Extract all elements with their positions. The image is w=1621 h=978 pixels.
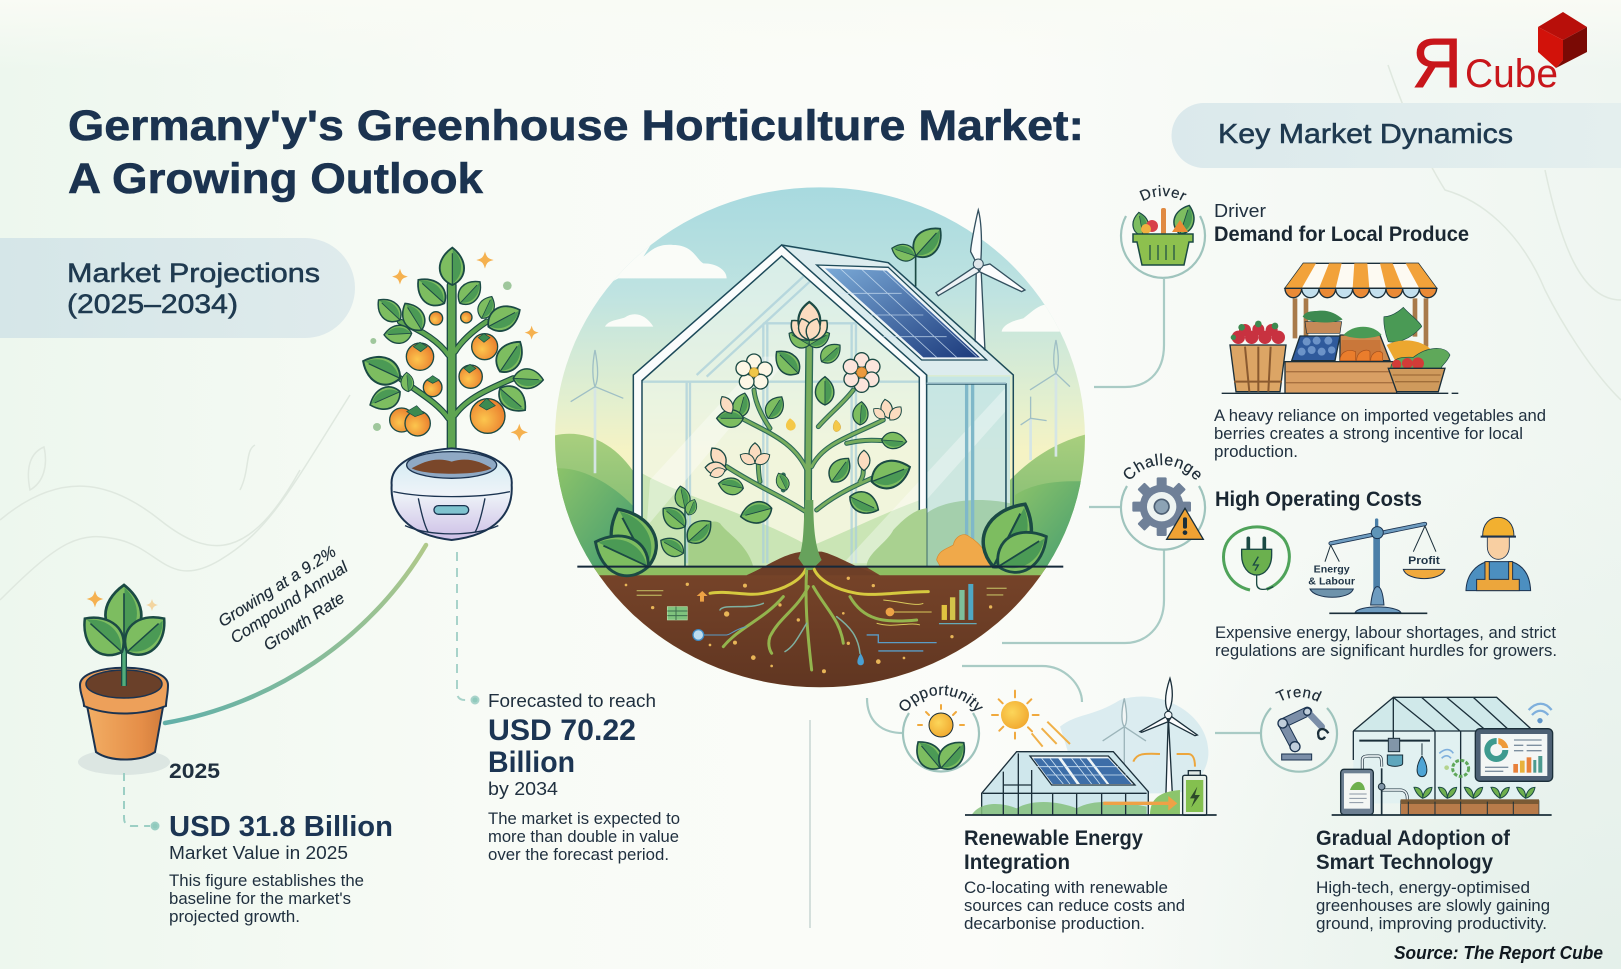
text block: challenge <box>1215 487 1557 660</box>
text block: driver: berries creates a strong incentive for local <box>1214 424 1523 443</box>
text block: 2034 forecast: over the forecast period. <box>488 845 669 864</box>
connector: challenge to centre <box>1002 507 1164 643</box>
text block: driver: production. <box>1214 442 1298 461</box>
title <box>68 102 1084 203</box>
text block: trend: greenhouses are slowly gaining <box>1316 896 1550 915</box>
connector: 2025 dashed <box>124 773 158 830</box>
bushes and ground <box>688 508 990 567</box>
panel: key market dynamics heading: Key Market Dynamics <box>1218 118 1513 149</box>
icon: energy plug, balance scale and worker: & Labour <box>1308 576 1355 587</box>
text block: opportunity: Co-locating with renewable <box>964 878 1168 897</box>
text block: 2025 value: This figure establishes the <box>169 871 364 890</box>
foreground plants <box>587 485 1056 584</box>
panel: market projections heading <box>0 238 355 338</box>
connector: driver to centre <box>1094 278 1164 387</box>
text block: challenge: High Operating Costs <box>1215 487 1422 511</box>
panel: market projections heading: Market Projections <box>67 258 320 288</box>
text block: 2025 value <box>169 760 393 926</box>
text block: 2034 forecast: more than double in value <box>488 827 679 846</box>
text block: driver: Demand for Local Produce <box>1214 223 1469 246</box>
tree flowers <box>705 302 905 480</box>
text block: challenge: regulations are significant hurdles for growers. <box>1215 641 1557 660</box>
text block: driver: Driver <box>1214 201 1266 221</box>
icon: smart greenhouse <box>1332 697 1553 815</box>
icon: challenge gear badge: Challenge <box>1124 453 1201 480</box>
icon: opportunity sun badge: Opportunity <box>900 685 983 712</box>
tree trunk and branches <box>727 348 883 563</box>
connector: opportunity to trend <box>1215 732 1262 734</box>
text block: opportunity: Integration <box>964 851 1070 874</box>
text block: opportunity: decarbonise production. <box>964 914 1145 933</box>
text block: 2025 value: Market Value in 2025 <box>169 842 348 863</box>
text block: 2034 forecast: Billion <box>488 746 575 779</box>
text block: 2025 value: USD 31.8 Billion <box>169 811 393 843</box>
icon: trend robot arm badge <box>1260 688 1338 773</box>
text block: 2025 value: baseline for the market's <box>169 889 351 908</box>
text block: opportunity <box>964 827 1185 933</box>
text block: trend: ground, improving productivity. <box>1316 914 1547 933</box>
text block: 2034 forecast <box>488 690 680 864</box>
title: A Growing Outlook <box>68 155 483 203</box>
text block: trend: Gradual Adoption of <box>1316 827 1511 850</box>
text block: opportunity: Renewable Energy <box>964 827 1143 850</box>
text block: 2034 forecast: The market is expected to <box>488 809 680 828</box>
icon: challenge gear badge <box>1120 453 1206 551</box>
text block: trend <box>1316 827 1550 933</box>
sprout behind greenhouse <box>889 220 949 287</box>
text block: trend: High-tech, energy-optimised <box>1316 878 1530 897</box>
icon: driver basket badge <box>1120 185 1206 279</box>
icon: energy plug, balance scale and worker: Profit <box>1408 555 1440 567</box>
icon: opportunity sun badge <box>900 685 983 773</box>
icon: fruit tree in smart pot <box>357 248 544 540</box>
icon: energy plug, balance scale and worker: Energy <box>1314 564 1350 575</box>
text block: challenge: Expensive energy, labour shortages, and strict <box>1215 623 1556 642</box>
text block: driver: A heavy reliance on imported vegetables and <box>1214 406 1546 425</box>
wind turbine <box>936 210 1025 350</box>
connector: opportunity to centre <box>867 666 1082 733</box>
CAGR label: Growing at a 9.2% <box>215 543 339 631</box>
text block: 2034 forecast: by 2034 <box>488 778 558 799</box>
CAGR label: Compound Annual <box>227 557 352 647</box>
arrow: growth curve <box>165 545 426 723</box>
logo: RCube: Cube <box>1465 52 1558 96</box>
solar panel <box>817 265 987 360</box>
tree leaves <box>717 339 915 527</box>
icon: seedling in terracotta pot <box>74 585 175 775</box>
logo: RCube <box>1412 12 1587 102</box>
vertical divider line <box>809 720 811 928</box>
text block: trend: Smart Technology <box>1316 851 1493 874</box>
text block: 2025 value: projected growth. <box>169 907 300 926</box>
icon: energy plug, balance scale and worker <box>1224 517 1531 613</box>
text block: 2034 forecast: Forecasted to reach <box>488 690 656 711</box>
icon: trend robot arm badge: Trend <box>1275 688 1322 702</box>
soil cross section with roots <box>594 552 1046 688</box>
icon: renewable energy greenhouse <box>965 678 1217 815</box>
panel: key market dynamics heading <box>1172 103 1621 168</box>
logo: RCube: Я <box>1412 24 1462 102</box>
text block: 2034 forecast: USD 70.22 <box>488 714 636 747</box>
text block: opportunity: sources can reduce costs and <box>964 896 1185 915</box>
central illustration: greenhouse with tree <box>550 180 1090 700</box>
source note: Source: The Report Cube <box>1394 943 1603 963</box>
text block: 2025 value: 2025 <box>169 760 220 783</box>
title: Germany'y's Greenhouse Horticulture Market: <box>68 102 1084 150</box>
icon: driver basket badge: Driver <box>1139 185 1187 201</box>
icon: market stall <box>1222 263 1458 393</box>
scene background: sky, clouds, hills <box>550 180 1090 700</box>
CAGR label: Growth Rate <box>261 589 348 655</box>
greenhouse structure <box>633 245 1013 567</box>
panel: market projections heading: (2025–2034) <box>67 289 238 319</box>
text block: driver <box>1214 201 1546 461</box>
connector: 2034 dashed <box>457 552 478 704</box>
